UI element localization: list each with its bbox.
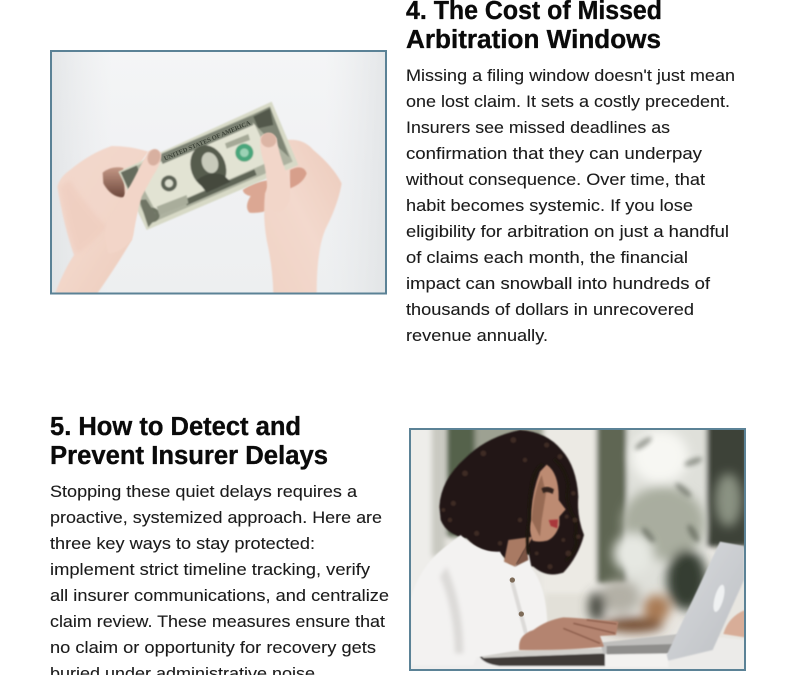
- heading: section 5: 5. How to Detect and: [50, 413, 301, 441]
- text block: section 4 body: of claims each month, the financial: [406, 249, 688, 267]
- heading: section 4: Arbitration Windows: [406, 26, 661, 54]
- text block: section 5 body: [50, 483, 389, 675]
- blurred background: [407, 423, 748, 623]
- panel: section 4 heading and body: [405, 0, 735, 345]
- heading: section 4: [406, 0, 662, 54]
- text block: section 4 body: Insurers see missed deadlines as: [406, 119, 670, 137]
- leaf flecks: [633, 435, 703, 544]
- right hand body and back fingers: [243, 180, 273, 213]
- text block: section 4 body: without consequence. Over time, that: [405, 171, 705, 189]
- bill: [118, 102, 298, 230]
- text block: section 4 body: eligibility for arbitration on just a handful: [406, 223, 729, 241]
- text block: section 5 body: proactive, systemized approach. Here are: [50, 509, 382, 527]
- shirt: [411, 535, 547, 665]
- laptop: [667, 542, 744, 661]
- text block: section 5 body: implement strict timeline tracking, verify: [50, 561, 371, 579]
- left hand body: [55, 146, 148, 293]
- right thumb: [260, 133, 290, 212]
- front curls and hair texture: [527, 460, 576, 560]
- text block: section 5 body: three key ways to stay protected:: [50, 535, 315, 553]
- text block: section 4 body: one lost claim. It sets a costly precedent.: [406, 93, 730, 111]
- neck: [504, 537, 533, 567]
- photo: woman with curly hair working on a laptop: [407, 423, 748, 675]
- face: [530, 465, 566, 542]
- heading: section 5: [50, 413, 328, 470]
- text block: section 5 body: Stopping these quiet delays requires a: [50, 483, 358, 501]
- text block: section 4 body: revenue annually.: [406, 327, 548, 345]
- text block: section 4 body: Missing a filing window doesn't just mean: [406, 67, 735, 85]
- text block: section 4 body: habit becomes systemic. If you lose: [406, 197, 693, 215]
- text block: section 4 body: thousands of dollars in unrecovered: [406, 301, 694, 319]
- hands: [519, 617, 618, 650]
- bill lettering: UNITED STATES OF AMERICA: [163, 119, 252, 163]
- heading: section 5: Prevent Insurer Delays: [50, 442, 328, 470]
- text block: section 4 body: [405, 67, 735, 345]
- text block: section 5 body: claim review. These measures ensure that: [50, 613, 385, 631]
- panel: section 5 heading and body: [50, 413, 389, 675]
- hair back mass: [439, 430, 584, 575]
- text block: section 4 body: impact can snowball into hundreds of: [406, 275, 710, 293]
- text block: section 5 body: all insurer communications, and centralize: [50, 587, 389, 605]
- photo: hands holding a one dollar bill: [51, 51, 386, 294]
- table and notebook: [410, 633, 747, 675]
- text block: section 4 body: confirmation that they can underpay: [406, 145, 703, 163]
- text block: section 5 body: no claim or opportunity for recovery gets: [50, 639, 376, 657]
- left thumb: [105, 150, 161, 253]
